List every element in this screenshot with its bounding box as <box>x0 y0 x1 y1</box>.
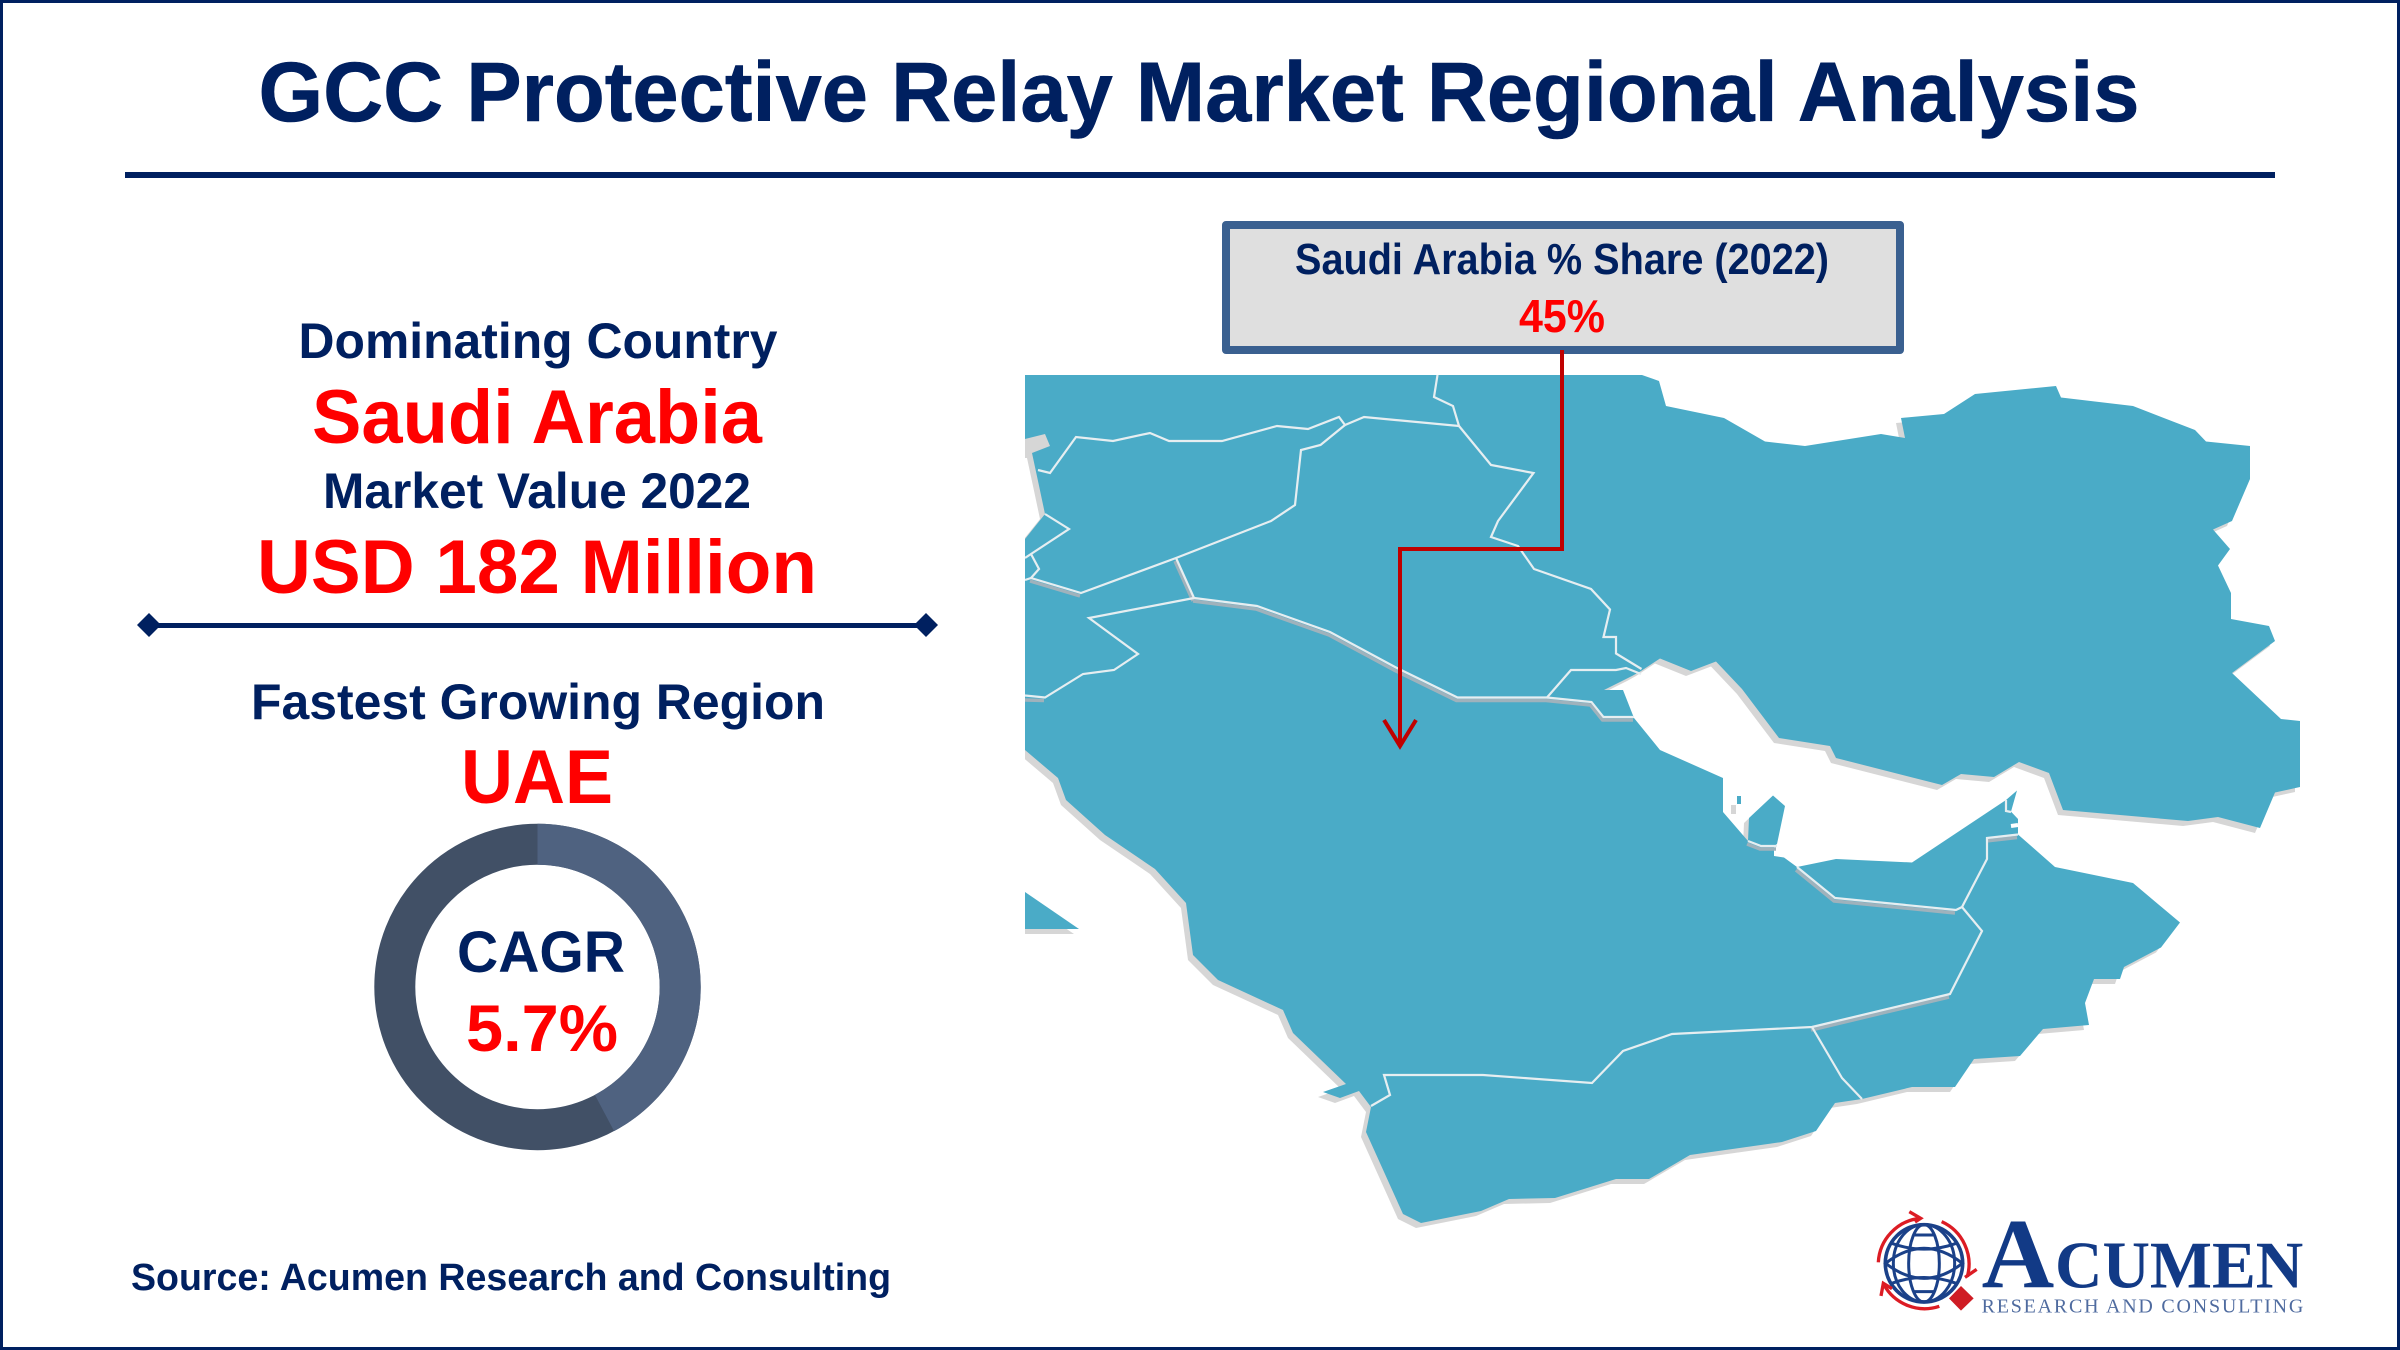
icon: globe <box>1885 1225 1963 1302</box>
callout: Saudi Arabia share <box>1226 225 1900 350</box>
wordmark: A <box>1982 1199 2054 1310</box>
label: dominating country: Dominating Country <box>298 313 778 369</box>
tagline: RESEARCH AND CONSULTING <box>1982 1295 2303 1317</box>
title: GCC Protective Relay Market Regional Analysis <box>258 45 2140 139</box>
map: GCC region <box>1020 375 2300 1228</box>
callout value: 45% <box>1519 290 1605 342</box>
icon: red arrows and diamond <box>1878 1212 1977 1309</box>
wordmark <box>1982 1199 2303 1310</box>
wordmark: CUMEN <box>2055 1229 2303 1303</box>
label: fastest growing region: Fastest Growing Region <box>251 674 825 730</box>
region name: UAE <box>461 735 613 820</box>
arrow: callout to Saudi Arabia <box>1384 350 1562 746</box>
CAGR label: CAGR <box>457 920 625 985</box>
source: Source: Acumen Research and Consulting <box>131 1257 891 1299</box>
country name: Saudi Arabia <box>312 375 763 460</box>
divider with diamonds <box>137 613 938 637</box>
CAGR value: 5.7% <box>466 991 618 1065</box>
label: market value: Market Value 2022 <box>323 463 751 519</box>
donut chart: CAGR <box>395 844 680 1130</box>
market value figure: USD 182 Million <box>257 525 817 610</box>
panel: dominating country <box>257 313 817 610</box>
panel: fastest growing region <box>251 674 825 820</box>
logo: Acumen Research and Consulting <box>1878 1199 2303 1317</box>
callout heading: Saudi Arabia % Share (2022) <box>1295 235 1829 284</box>
